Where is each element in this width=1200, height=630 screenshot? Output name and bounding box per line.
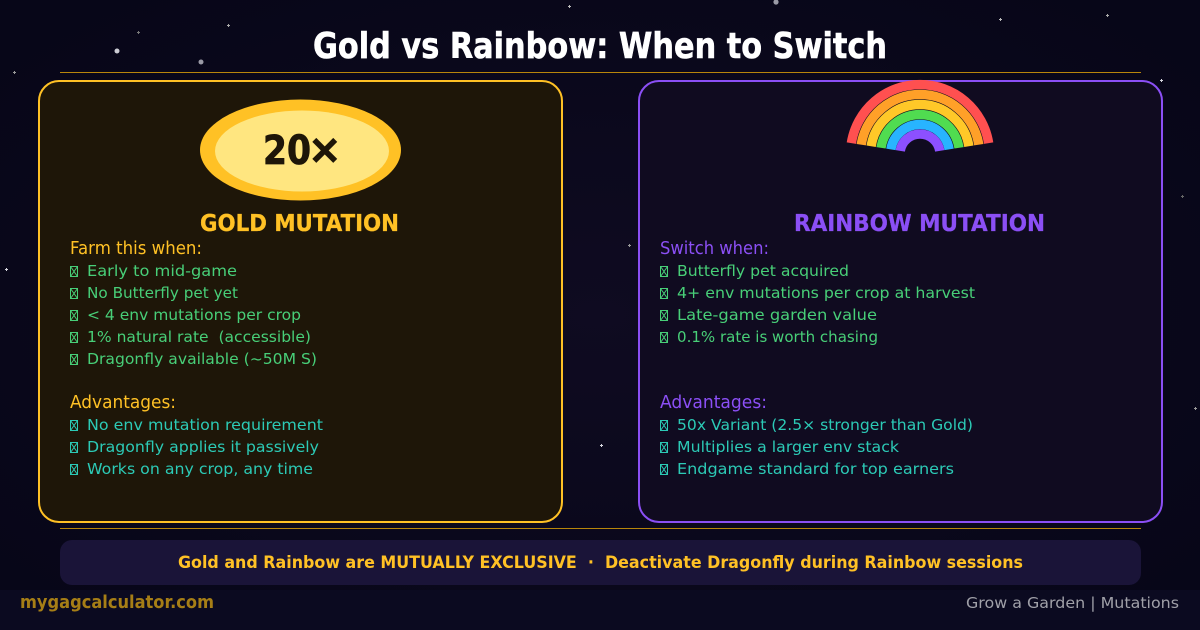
gold advantages list: Works on any crop, any time [87, 460, 313, 478]
title: Gold vs Rainbow: When to Switch [313, 26, 887, 67]
icon: rainbow [851, 85, 989, 151]
rainbow advantages list: Multiplies a larger env stack [677, 438, 899, 456]
icon: gold 20x badge: × [308, 127, 342, 173]
gold advantages list: Dragonfly applies it passively [87, 438, 319, 456]
farm conditions list: 1% natural rate (accessible) [87, 328, 311, 346]
rainbow advantages list [660, 416, 973, 478]
rainbow heading: RAINBOW MUTATION [794, 211, 1045, 237]
switch conditions list: 0.1% rate is worth chasing [677, 328, 878, 346]
callout banner: Gold and Rainbow are MUTUALLY EXCLUSIVE · Deactivate Dragonfly during Rainbow sessions [178, 553, 1023, 573]
gold advantages heading: Advantages: [70, 393, 176, 413]
farm conditions list [70, 262, 317, 368]
rainbow advantages heading: Advantages: [660, 393, 767, 413]
farm conditions list: Early to mid-game [87, 262, 237, 280]
divider line top [60, 72, 1141, 73]
farm this when heading: Farm this when: [70, 239, 202, 259]
panel: rainbow mutation [639, 81, 1162, 522]
rainbow advantages list: 50x Variant (2.5× stronger than Gold) [677, 416, 973, 434]
footer site name: mygagcalculator.com [20, 592, 214, 613]
farm conditions list: < 4 env mutations per crop [87, 306, 301, 324]
switch conditions list: 4+ env mutations per crop at harvest [677, 284, 975, 302]
footer label: Grow a Garden | Mutations [966, 594, 1179, 612]
switch when heading: Switch when: [660, 239, 769, 259]
switch conditions list: Late-game garden value [677, 306, 877, 324]
divider line bottom [60, 528, 1141, 529]
farm conditions list: No Butterfly pet yet [87, 284, 238, 302]
switch conditions list: Butterfly pet acquired [677, 262, 849, 280]
gold heading: GOLD MUTATION [200, 211, 399, 237]
icon: gold 20x badge [200, 100, 401, 200]
starfield [5, 0, 1197, 447]
rainbow panel background [639, 81, 1162, 522]
rainbow advantages list: Endgame standard for top earners [677, 460, 954, 478]
footer band [0, 590, 1200, 630]
gold advantages list: No env mutation requirement [87, 416, 323, 434]
callout banner [60, 540, 1141, 585]
panel: gold mutation [39, 81, 562, 522]
farm conditions list: Dragonfly available (~50M S) [87, 350, 317, 368]
gold advantages list [70, 416, 323, 478]
gold panel background [39, 81, 562, 522]
icon: gold 20x badge: 20 [263, 128, 311, 174]
switch conditions list [660, 262, 975, 346]
